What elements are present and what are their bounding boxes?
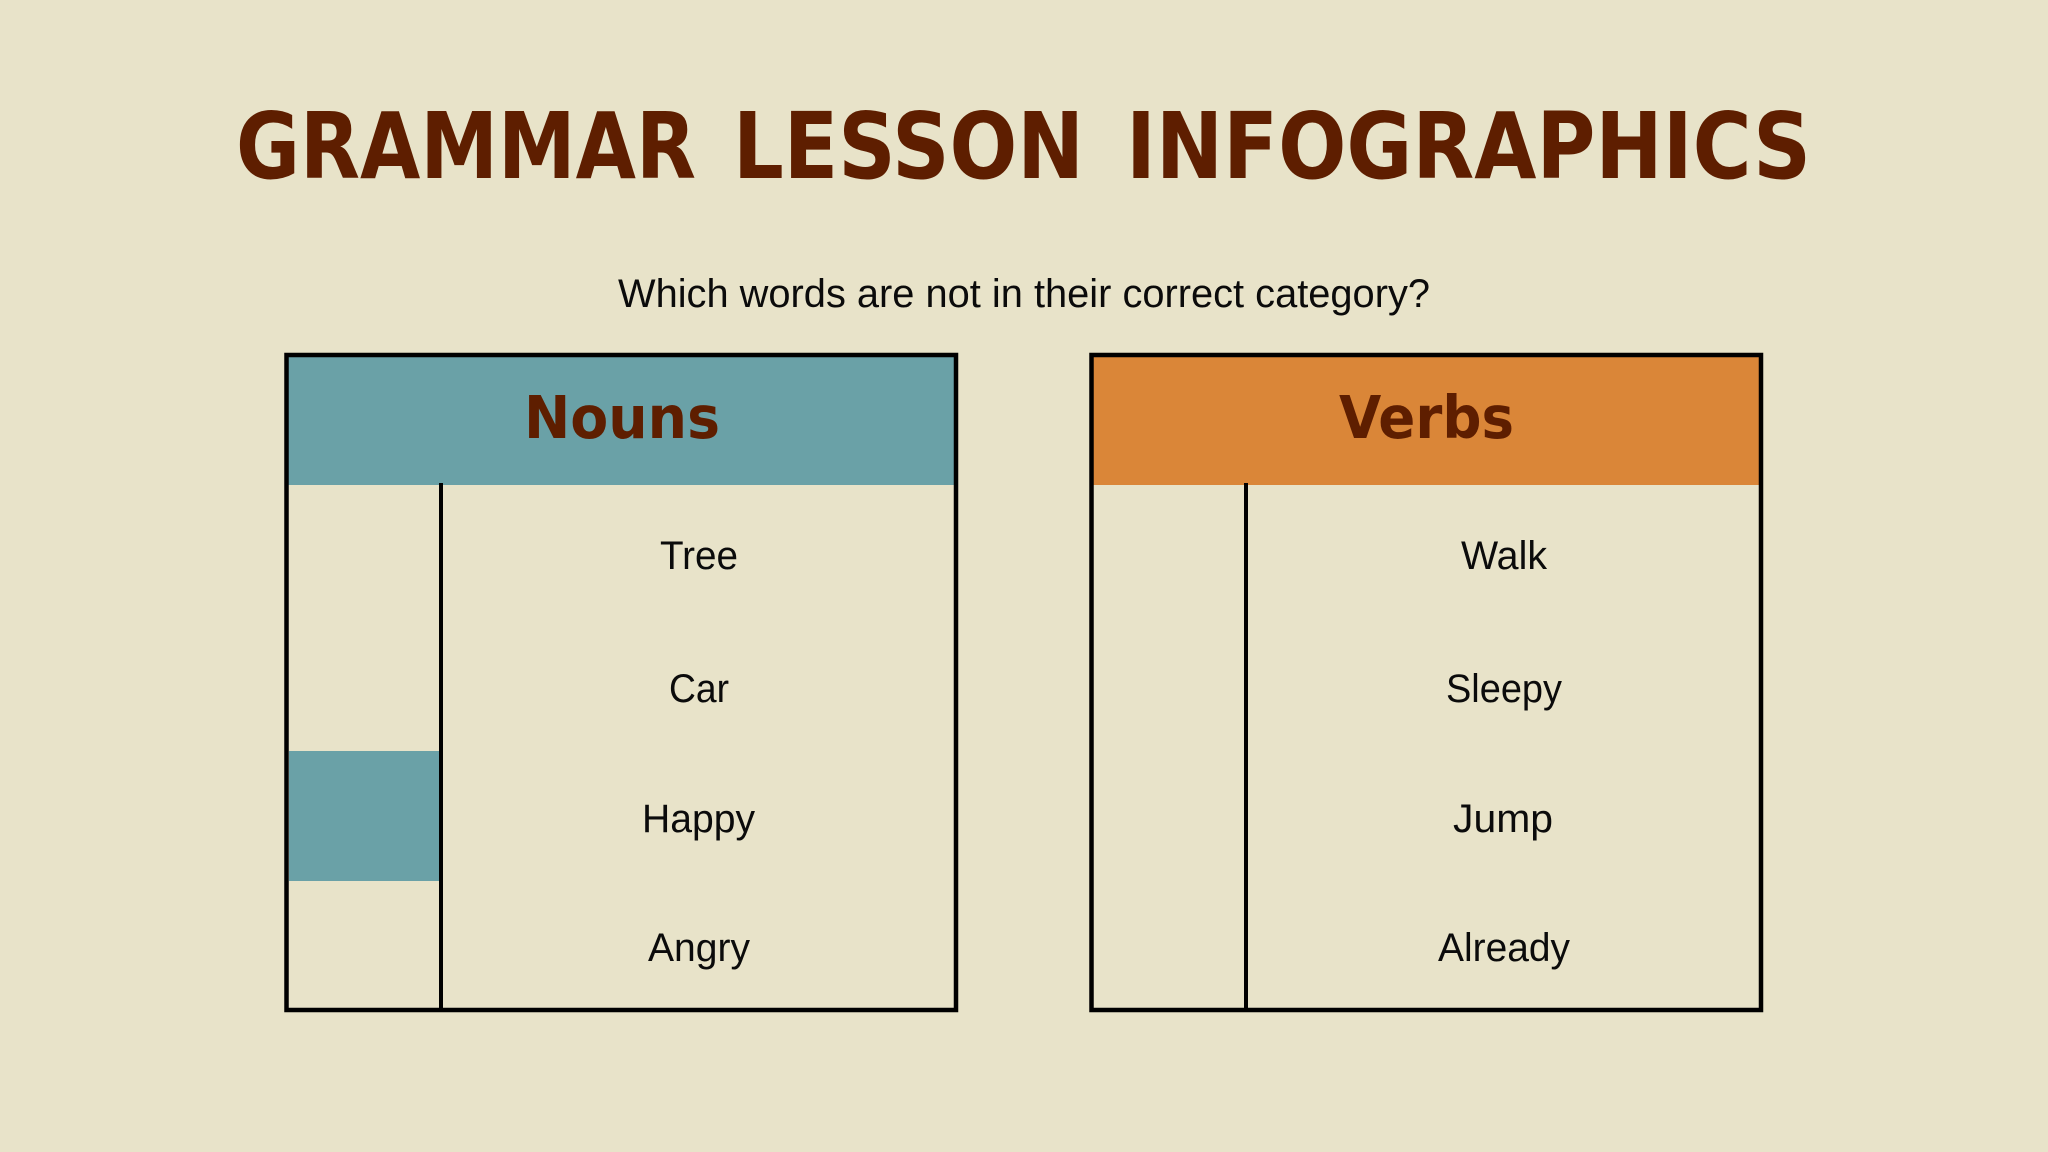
title xyxy=(236,93,1811,200)
subtitle question: Which words are not in their correct category? xyxy=(618,272,1430,316)
word: Angry: Angry xyxy=(648,926,750,970)
verbs header band xyxy=(1091,355,1761,485)
nouns heading: Nouns xyxy=(524,383,720,452)
word: Already: Already xyxy=(1438,926,1570,970)
panel: nouns table xyxy=(286,355,956,1010)
word: Sleepy: Sleepy xyxy=(1446,667,1562,711)
word: Jump: Jump xyxy=(1453,797,1553,841)
word: Walk: Walk xyxy=(1461,534,1548,578)
title: INFOGRAPHICS xyxy=(1126,93,1811,200)
nouns column divider xyxy=(439,483,443,1010)
word: Car: Car xyxy=(669,667,729,711)
nouns highlighted row marker xyxy=(289,751,439,881)
title: GRAMMAR xyxy=(236,93,696,200)
nouns table border xyxy=(286,355,956,1010)
word: Tree: Tree xyxy=(660,534,738,578)
word: Happy: Happy xyxy=(642,797,755,841)
panel: verbs table xyxy=(1091,355,1761,1010)
nouns header band xyxy=(287,355,956,485)
verbs column divider xyxy=(1244,483,1248,1010)
verbs table border xyxy=(1092,355,1761,1010)
title: LESSON xyxy=(733,93,1084,200)
verbs heading: Verbs xyxy=(1339,383,1514,452)
